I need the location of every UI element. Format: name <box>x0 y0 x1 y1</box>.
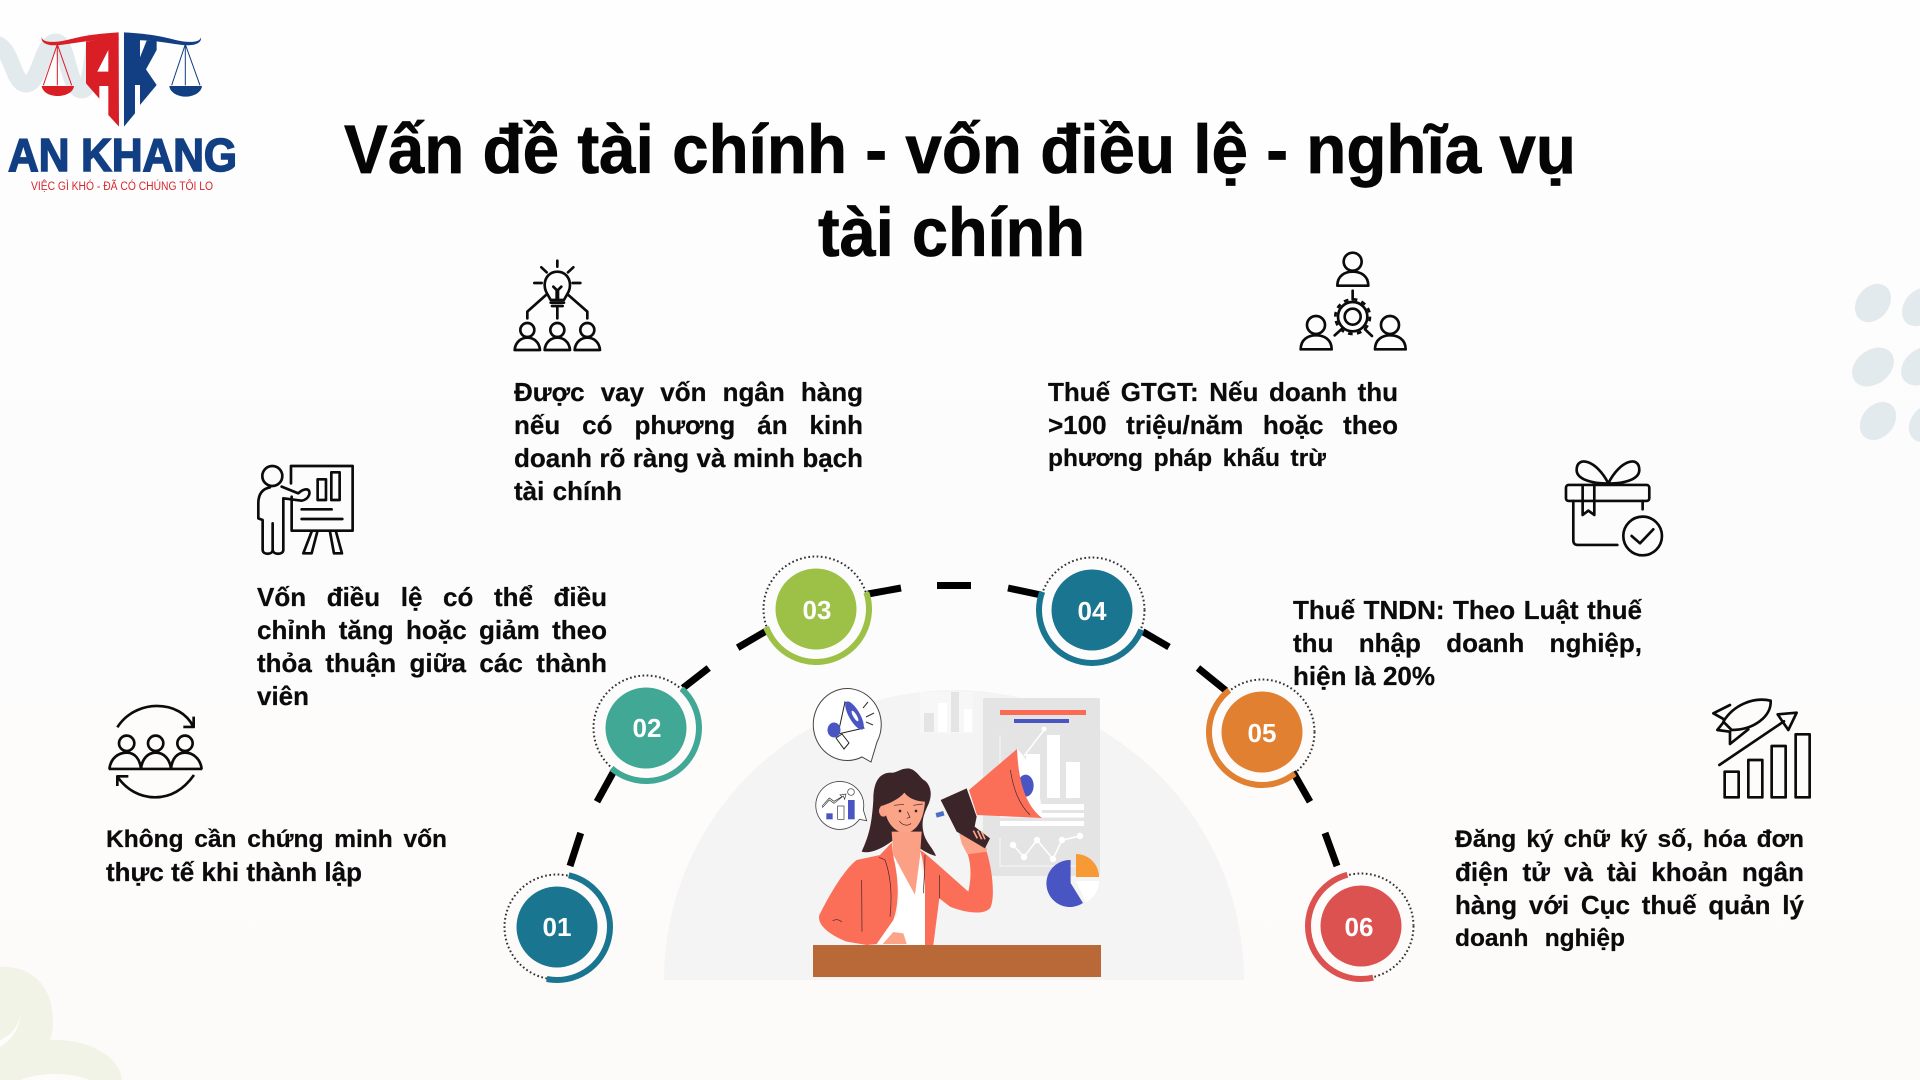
text block: step 01: Không cần chứng minh vốn <box>106 826 447 853</box>
illustration: megaphone speech bubble <box>813 689 881 762</box>
decorative ovals right edge <box>1844 277 1920 449</box>
text block: step 06: hàng với Cục thuế quản lý <box>1455 890 1804 920</box>
text block: step 04 <box>1048 377 1398 472</box>
icon: presenter with board <box>258 466 353 554</box>
small growth bubble <box>816 781 867 829</box>
step 02 badge <box>571 653 721 803</box>
text block: step 02 <box>257 582 607 711</box>
text block: step 02: viên <box>257 681 309 711</box>
icon: team around gear <box>1301 253 1406 349</box>
text block: step 05: thu nhập doanh nghiệp, <box>1293 628 1642 658</box>
illustration: faint bar chart <box>920 692 973 733</box>
text block: step 02: Vốn điều lệ có thể điều <box>257 582 607 612</box>
illustration: pie chart <box>1046 854 1099 907</box>
step 01 badge <box>493 863 621 991</box>
title: Vấn đề tài chính - vốn điều lệ - nghĩa vụ <box>344 111 1576 188</box>
text block: step 05: hiện là 20% <box>1293 661 1435 691</box>
illustration: woman with megaphone <box>816 749 1042 945</box>
logo: An Khang: VIỆC GÌ KHÓ - ĐÃ CÓ CHÚNG TÔI LO <box>31 180 213 193</box>
logo: An Khang <box>0 32 237 193</box>
illustration: charts board <box>983 698 1100 876</box>
icon: rocket growth chart <box>1713 700 1810 797</box>
title <box>344 111 1576 271</box>
step 03 badge <box>749 542 883 676</box>
text block: step 03: tài chính <box>514 476 622 506</box>
text block: step 03: Được vay vốn ngân hàng <box>514 377 863 407</box>
step 06 badge <box>1297 862 1425 990</box>
step 06 badge: 06 <box>1345 912 1373 942</box>
text block: step 04: phương pháp khấu trừ <box>1048 445 1326 472</box>
text block: step 02: thỏa thuận giữa các thành <box>257 648 607 678</box>
step 04 badge: 04 <box>1078 596 1107 626</box>
text block: step 03: nếu có phương án kinh <box>514 410 863 440</box>
text block: step 05 <box>1293 595 1642 691</box>
text block: step 03: doanh rõ ràng và minh bạch <box>514 443 863 473</box>
step 05 badge <box>1188 658 1336 806</box>
dashed connector path <box>570 586 1337 866</box>
step 01 badge: 01 <box>543 912 571 942</box>
text block: step 06: doanh nghiệp <box>1455 925 1625 952</box>
icon: gift with check <box>1566 461 1662 555</box>
text block: step 06 <box>1455 826 1804 952</box>
text block: step 06: điện tử và tài khoản ngân <box>1455 857 1804 887</box>
text block: step 05: Thuế TNDN: Theo Luật thuế <box>1293 595 1642 625</box>
icon: lightbulb and team <box>515 261 600 350</box>
text block: step 04: >100 triệu/năm hoặc theo <box>1048 410 1398 440</box>
illustration: desk <box>813 945 1101 977</box>
text block: step 03 <box>514 377 863 506</box>
text block: step 01: thực tế khi thành lập <box>106 857 362 887</box>
icon: people cycle <box>109 706 202 797</box>
text block: step 06: Đăng ký chữ ký số, hóa đơn <box>1455 826 1804 853</box>
text block: step 01 <box>106 826 447 887</box>
step 03 badge: 03 <box>803 595 831 625</box>
text block: step 02: chỉnh tăng hoặc giảm theo <box>257 615 607 645</box>
title: tài chính <box>818 194 1085 271</box>
step 04 badge <box>1023 541 1161 679</box>
text block: step 04: Thuế GTGT: Nếu doanh thu <box>1048 377 1398 407</box>
decorative blob bottom-left <box>0 967 122 1080</box>
logo: An Khang: AN KHANG <box>8 129 237 181</box>
step 05 badge: 05 <box>1248 718 1276 748</box>
dome background <box>664 690 1244 980</box>
step 02 badge: 02 <box>633 713 661 743</box>
